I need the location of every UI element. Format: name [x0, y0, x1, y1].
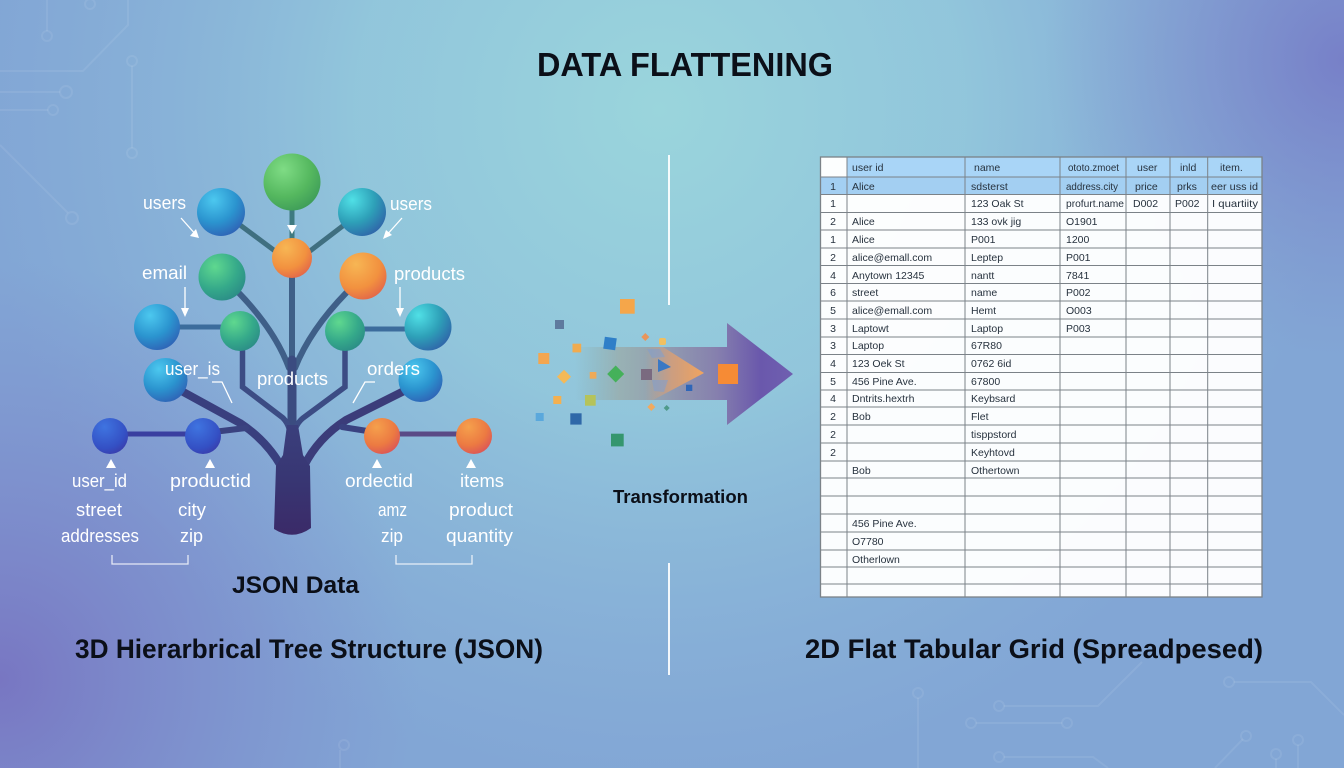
tree labels: amz: [378, 500, 407, 520]
table cell text: Anytown 12345: [852, 270, 925, 282]
table cell text: P003: [1066, 323, 1091, 335]
table cell text: sdsterst: [971, 181, 1008, 193]
table cell text: Keyhtovd: [971, 447, 1015, 459]
tree labels: users: [390, 194, 432, 214]
table column headers: item.: [1220, 162, 1243, 174]
table row numbers: 1: [830, 181, 836, 193]
table cell text: 456 Pine Ave.: [852, 518, 917, 530]
table cell text: Bob: [852, 465, 871, 477]
tree labels: productid: [170, 471, 251, 491]
table row numbers: 4: [830, 270, 836, 282]
table row numbers: 5: [830, 305, 836, 317]
tree labels: quantity: [446, 526, 513, 546]
table cell text: nantt: [971, 270, 994, 282]
inner orange arrowhead: [645, 347, 704, 400]
table row numbers: 2: [830, 411, 836, 423]
table cell text: price: [1135, 181, 1158, 193]
tree arrows and leaders: [106, 218, 476, 564]
table cell text: O7780: [852, 536, 884, 548]
table cell text: Leptep: [971, 252, 1003, 264]
tree labels: products: [394, 264, 465, 284]
table row numbers: 3: [830, 323, 836, 335]
tree branches: [110, 208, 474, 466]
tree labels: orders: [367, 359, 420, 379]
table cell text: 1200: [1066, 234, 1090, 246]
table cell text: [852, 181, 1259, 566]
data particles: [536, 299, 738, 446]
table cell text: profurt.name: [1066, 198, 1124, 210]
tree labels: email: [142, 263, 187, 283]
table row numbers: 6: [830, 287, 836, 299]
table cell text: Alice: [852, 234, 875, 246]
table cell text: 123 Oak St: [971, 198, 1024, 210]
table cell text: Dntrits.hextrh: [852, 393, 915, 405]
table cell text: O003: [1066, 305, 1092, 317]
table row numbers: 2: [830, 252, 836, 264]
table cell text: 0762 6id: [971, 358, 1011, 370]
table row numbers: 4: [830, 393, 836, 405]
table cell text: 456 Pine Ave.: [852, 376, 917, 388]
table row numbers: 2: [830, 429, 836, 441]
table row numbers: 1: [830, 234, 836, 246]
table cell text: O1901: [1066, 216, 1098, 228]
tree diagram: JSON hierarchy: [61, 154, 513, 564]
table cell text: alice@emall.com: [852, 252, 932, 264]
table column headers: inld: [1180, 162, 1197, 174]
table cell text: P001: [971, 234, 996, 246]
right heading: 2D Flat Tabular Grid (Spreadpesed): [805, 634, 1263, 664]
tree labels: ordectid: [345, 471, 413, 491]
tree labels: products: [257, 369, 328, 389]
table cell text: 7841: [1066, 270, 1090, 282]
table header rows: [820, 157, 1262, 194]
tree labels: items: [460, 471, 504, 491]
table cell text: Bob: [852, 411, 871, 423]
table row numbers: 5: [830, 376, 836, 388]
table cell text: 67R80: [971, 340, 1002, 352]
table row numbers: 2: [830, 216, 836, 228]
table cell text: street: [852, 287, 878, 299]
dividers: [668, 155, 670, 675]
table cell text: Flet: [971, 411, 989, 423]
tree labels: addresses: [61, 526, 139, 546]
tree nodes: [92, 154, 492, 454]
tree labels: user_is: [165, 359, 220, 380]
table cell text: eer uss id: [1211, 181, 1258, 193]
tree labels: zip: [381, 526, 403, 546]
table cell text: 67800: [971, 376, 1000, 388]
table cell text: name: [971, 287, 997, 299]
table cell text: I quartiity: [1212, 198, 1259, 210]
left heading: 3D Hierarbrical Tree Structure (JSON): [75, 634, 543, 664]
table cell text: Laptop: [852, 340, 884, 352]
table column headers: user id: [852, 162, 884, 174]
table cell text: 123 Oek St: [852, 358, 905, 370]
table cell text: Otherlown: [852, 554, 900, 566]
table cell text: P002: [1066, 287, 1091, 299]
table cell text: P002: [1175, 198, 1200, 210]
pale blue blots inside arrow: [647, 349, 668, 392]
table cell text: D002: [1133, 198, 1158, 210]
table background: [820, 157, 1262, 597]
table cell text: Laptop: [971, 323, 1003, 335]
table column headers: name: [974, 162, 1000, 174]
table row numbers: 3: [830, 340, 836, 352]
tree labels: zip: [180, 526, 203, 546]
tree labels: product: [449, 500, 513, 520]
tree labels: [61, 193, 513, 546]
table cell text: Keybsard: [971, 393, 1016, 405]
table cell text: Alice: [852, 216, 875, 228]
transformation arrow: [536, 299, 793, 446]
arrow body: [575, 323, 793, 425]
title: DATA FLATTENING: [537, 46, 833, 83]
tree labels: user_id: [72, 471, 127, 492]
table cell text: Laptowt: [852, 323, 889, 335]
table column headers: ototo.zmoet: [1068, 162, 1119, 174]
flat table: [820, 157, 1262, 597]
table row numbers: 2: [830, 447, 836, 459]
table cell text: P001: [1066, 252, 1091, 264]
table cell text: 133 ovk jig: [971, 216, 1021, 228]
table row numbers: 4: [830, 358, 836, 370]
tree labels: users: [143, 193, 186, 213]
table cell text: Hemt: [971, 305, 996, 317]
table cell text: tisppstord: [971, 429, 1017, 441]
table cell text: Alice: [852, 181, 875, 193]
table cell text: address.city: [1066, 181, 1119, 193]
tree labels: city: [178, 500, 206, 520]
table row numbers: 1: [830, 198, 836, 210]
table row numbers: [830, 181, 836, 459]
table column headers: [852, 162, 1243, 174]
tree trunk: [274, 425, 311, 535]
JSON Data label: JSON Data: [232, 572, 360, 599]
table cell text: alice@emall.com: [852, 305, 932, 317]
tree labels: street: [76, 500, 122, 520]
Transformation label: Transformation: [613, 487, 748, 507]
table cell text: Othertown: [971, 465, 1020, 477]
table cell text: prks: [1177, 181, 1197, 193]
table column headers: user: [1137, 162, 1158, 174]
